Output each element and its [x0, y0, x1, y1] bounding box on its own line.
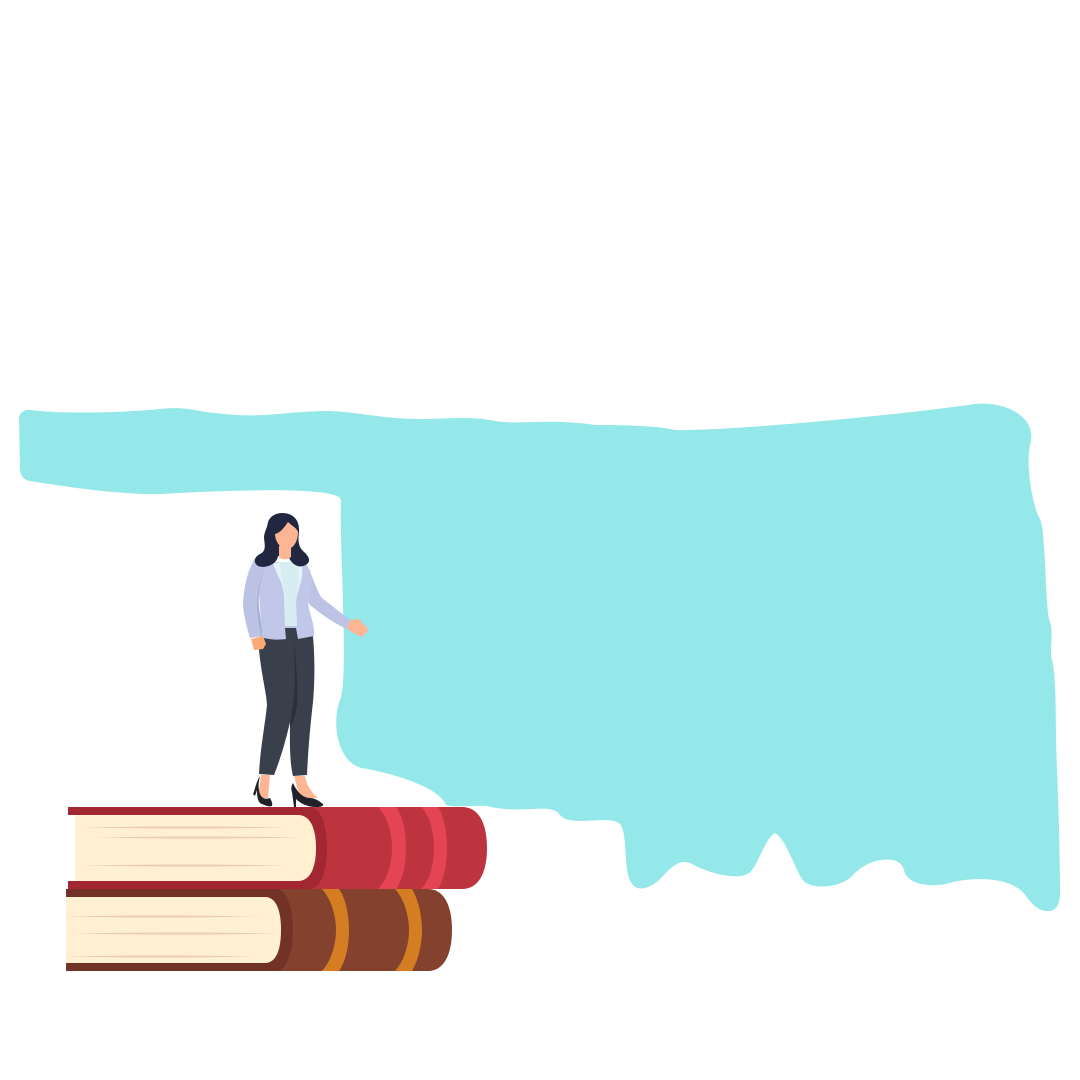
page lines — [85, 826, 298, 866]
trouser fold — [290, 640, 297, 728]
jacket body — [257, 562, 314, 640]
hair — [255, 513, 309, 567]
neck — [279, 546, 291, 559]
left hand — [251, 636, 266, 650]
book: red, top of stack — [68, 807, 487, 889]
sleeve seam — [257, 570, 264, 636]
right shoe — [291, 783, 323, 807]
pages — [66, 897, 281, 963]
spine band right — [421, 807, 447, 889]
inner cover edge — [68, 807, 327, 889]
book cover and spine — [68, 807, 487, 889]
feet — [258, 775, 318, 798]
pages — [75, 815, 316, 881]
right hand — [347, 619, 368, 637]
teal dripping banner shape — [19, 404, 1060, 911]
face — [275, 522, 298, 550]
woman figure — [243, 513, 368, 807]
spine band left — [322, 889, 349, 971]
lapel ruffle — [273, 563, 302, 600]
left sleeve — [243, 558, 266, 638]
left shoe — [253, 776, 272, 806]
page lines — [66, 916, 275, 958]
spine band left — [378, 807, 406, 889]
book cover and spine — [66, 889, 452, 971]
legs — [258, 626, 314, 776]
blouse — [279, 562, 299, 626]
book: brown, bottom of stack — [66, 889, 452, 971]
spine band right — [395, 889, 422, 971]
right sleeve — [306, 564, 350, 629]
inner cover edge — [66, 889, 293, 971]
